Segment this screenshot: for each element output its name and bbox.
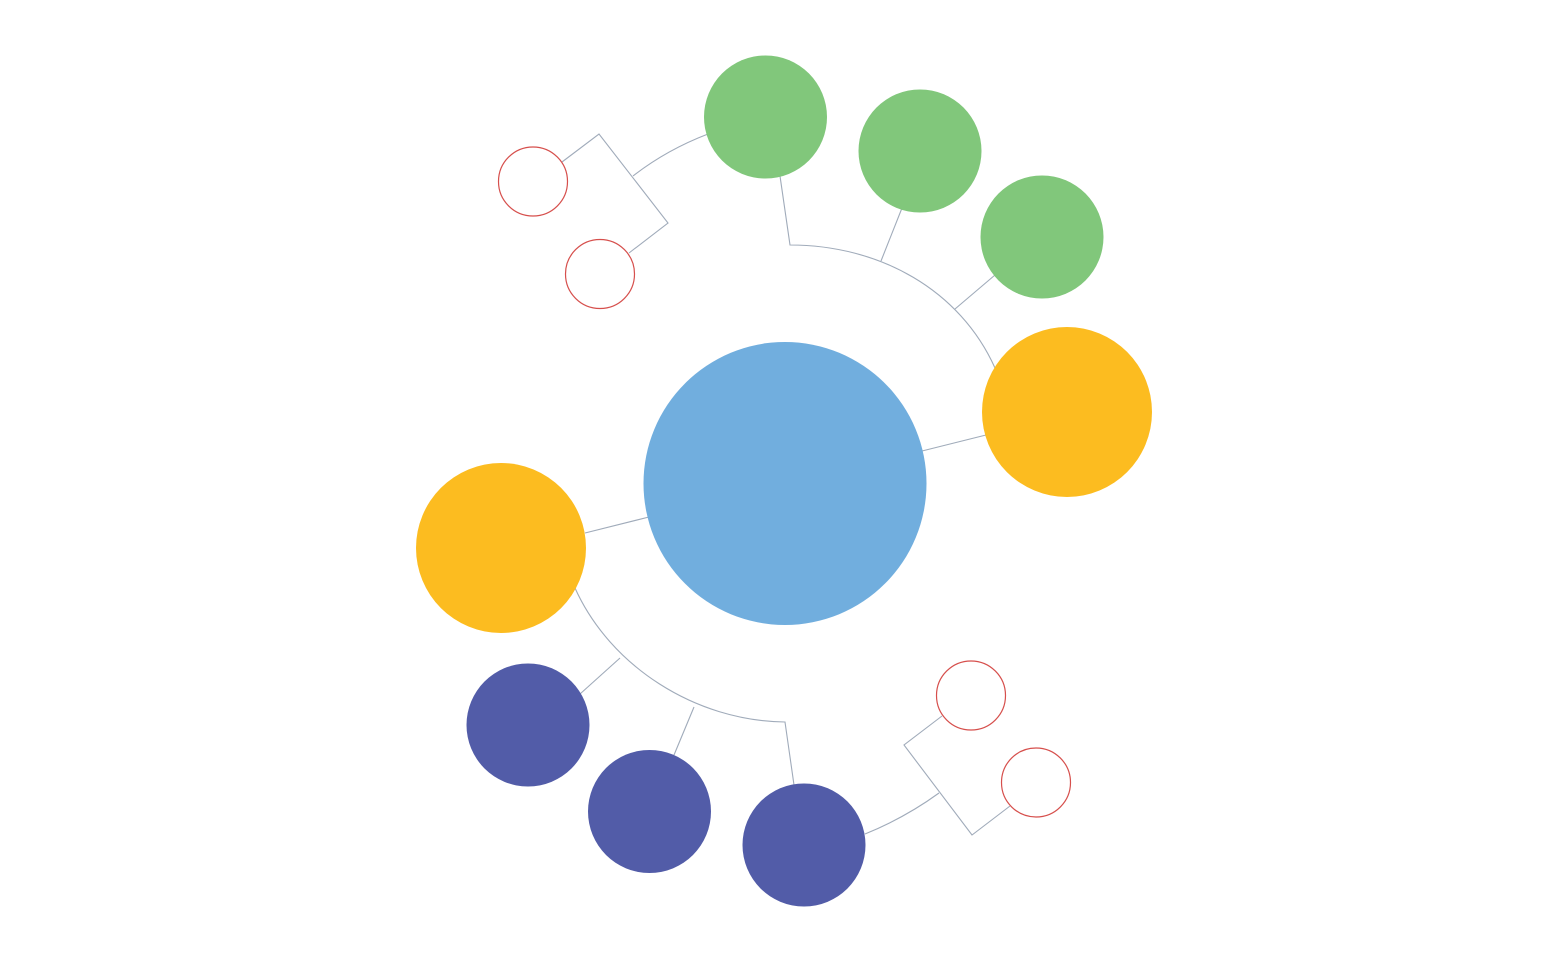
central circle <box>644 342 926 625</box>
yellow circle left <box>416 463 586 633</box>
connector lines <box>562 134 1010 835</box>
green circle 2 <box>858 90 982 212</box>
red outline circle top 2 <box>566 240 634 308</box>
red outline circle bottom 1 <box>936 661 1006 730</box>
yellow circle right <box>982 327 1152 497</box>
indigo circle 2 <box>588 750 711 873</box>
indigo circle 1 <box>466 664 590 786</box>
red outline circle bottom 2 <box>1002 748 1070 817</box>
green circle 3 <box>980 176 1104 298</box>
red outline circle top 1 <box>498 147 568 216</box>
indigo circle 3 <box>742 784 866 906</box>
green circle 1 <box>704 56 827 178</box>
